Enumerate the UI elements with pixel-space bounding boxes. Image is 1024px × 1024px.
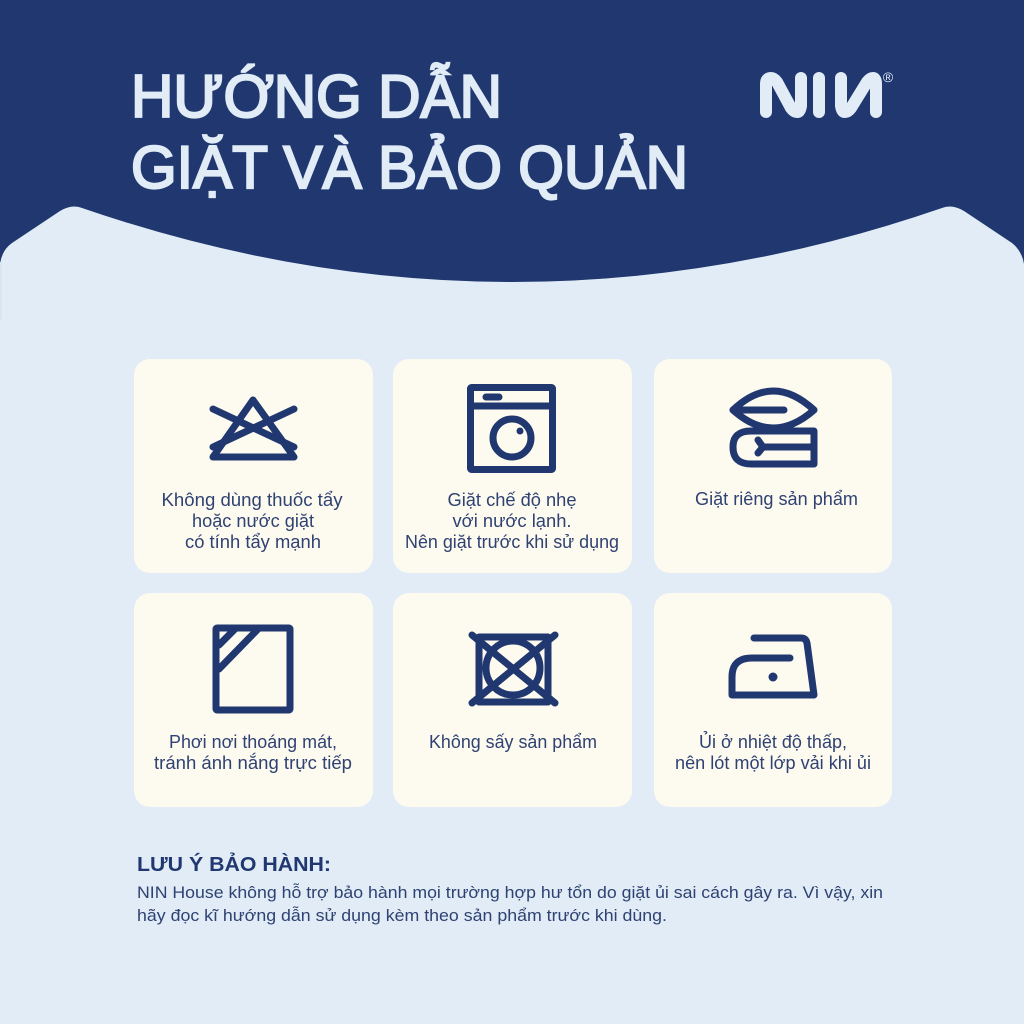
title bbox=[131, 63, 688, 201]
title: GIẶT VÀ BẢO QUẢN bbox=[131, 134, 688, 201]
card text bbox=[154, 732, 352, 773]
icon: pillow and folded fabric bbox=[733, 391, 814, 464]
card text: Không dùng thuốc tẩy bbox=[162, 490, 342, 510]
card: no tumble dry bbox=[393, 593, 632, 807]
card text: Không sấy sản phẩm bbox=[429, 732, 597, 752]
card: low-heat ironing bbox=[654, 593, 892, 807]
warranty body bbox=[137, 883, 883, 925]
logo: NIN: ® bbox=[883, 69, 894, 85]
warranty body: NIN House không hỗ trợ bảo hành mọi trường hợp hư tổn do giặt ủi sai cách gây ra. Vì vậy, xin bbox=[137, 883, 883, 902]
icon: iron bbox=[732, 638, 814, 695]
card text: với nước lạnh. bbox=[452, 511, 572, 531]
card text: Ủi ở nhiệt độ thấp, bbox=[699, 731, 847, 752]
icon: shade drying square bbox=[216, 628, 290, 710]
card: no bleach bbox=[134, 359, 373, 573]
warranty heading: LƯU Ý BẢO HÀNH: bbox=[137, 852, 331, 876]
card text: Giặt chế độ nhẹ bbox=[448, 490, 576, 510]
card text: có tính tẩy mạnh bbox=[185, 532, 321, 552]
icon: crossed triangle bbox=[213, 400, 294, 457]
card text bbox=[162, 490, 342, 552]
warranty note bbox=[137, 852, 883, 925]
warranty body: hãy đọc kĩ hướng dẫn sử dụng kèm theo sản phẩm trước khi dùng. bbox=[137, 906, 667, 925]
header band bbox=[0, 0, 1024, 282]
card text: Phơi nơi thoáng mát, bbox=[169, 732, 337, 752]
card text bbox=[405, 490, 619, 552]
card text: Giặt riêng sản phẩm bbox=[695, 489, 858, 509]
card: wash separately bbox=[654, 359, 892, 573]
card text bbox=[675, 731, 871, 773]
card: dry in shade bbox=[134, 593, 373, 807]
card text: tránh ánh nắng trực tiếp bbox=[154, 752, 352, 773]
card text: nên lót một lớp vải khi ủi bbox=[675, 753, 871, 773]
card text: hoặc nước giặt bbox=[192, 511, 314, 531]
title: HƯỚNG DẪN bbox=[131, 63, 502, 130]
card: gentle wash bbox=[393, 359, 632, 573]
card text: Nên giặt trước khi sử dụng bbox=[405, 532, 619, 552]
icon: washing machine bbox=[470, 388, 552, 470]
icon: crossed tumble dry bbox=[472, 635, 555, 703]
logo: NIN bbox=[766, 69, 894, 112]
